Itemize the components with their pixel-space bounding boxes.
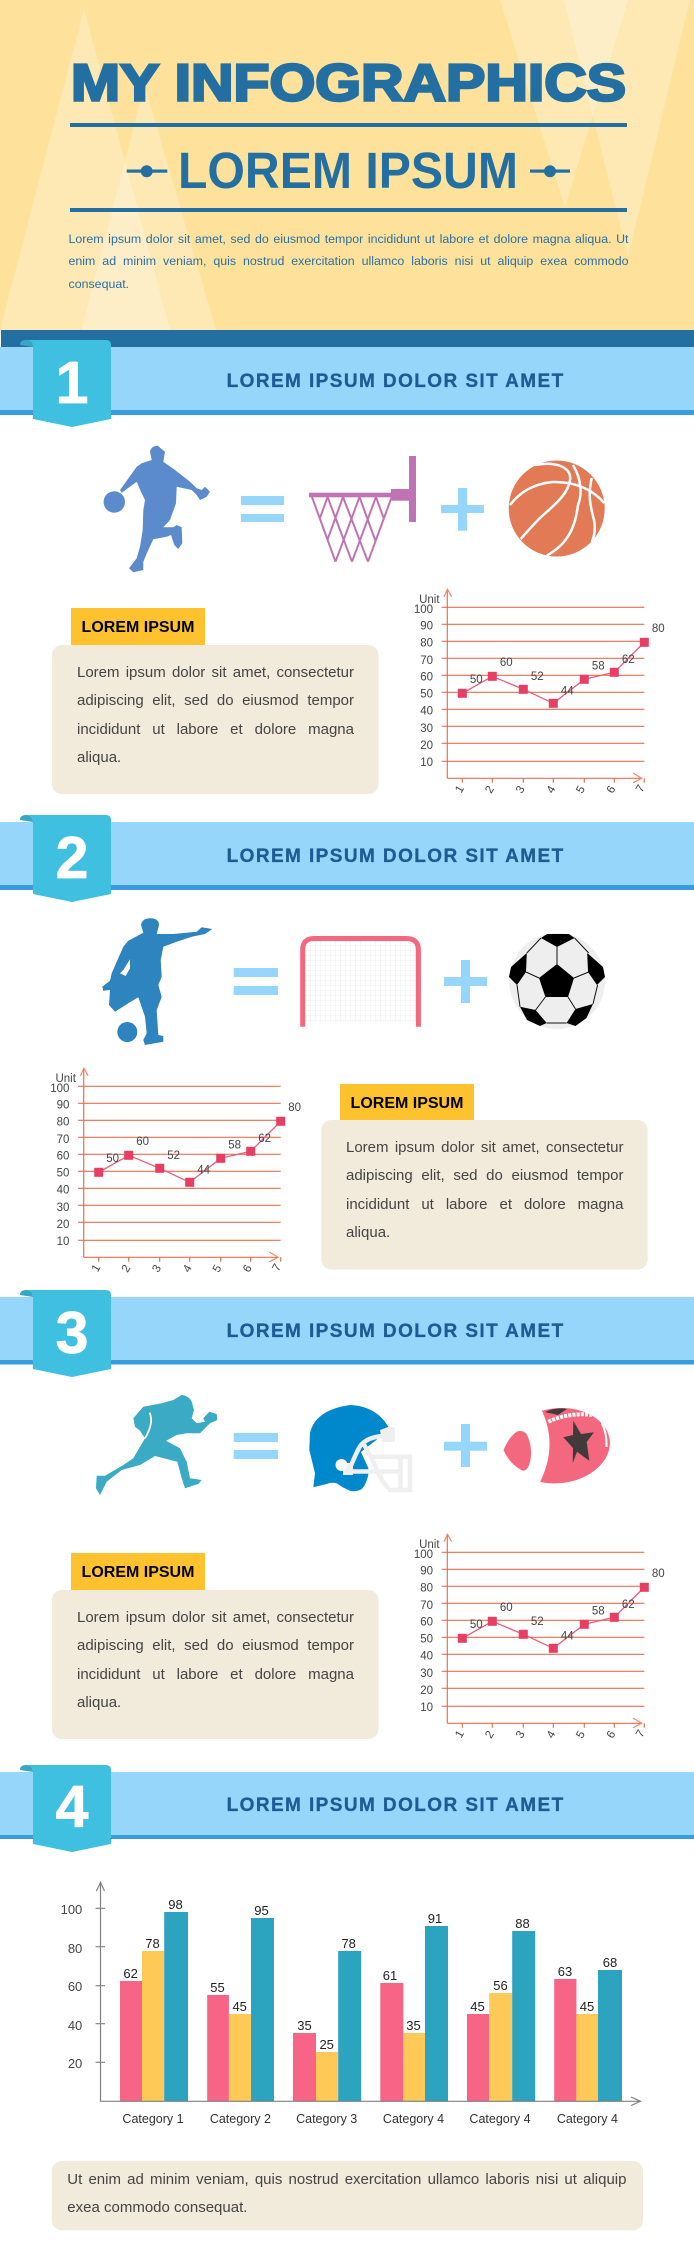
tag (71, 608, 205, 645)
icon: plus sign (444, 1424, 487, 1467)
section 1 line chart (414, 589, 665, 796)
section 1 line chart: 44 (561, 685, 574, 697)
value labels: 62 (123, 1966, 138, 1981)
tag: LOREM IPSUM (82, 619, 194, 636)
yellow series (142, 1951, 598, 2101)
y axis labels (61, 1902, 82, 2071)
section 4 (0, 1765, 694, 2230)
value labels: 35 (406, 2018, 421, 2033)
category labels: Category 1 (122, 2112, 184, 2126)
section 2 line chart: 10 (57, 1236, 69, 1248)
value labels: 45 (232, 1999, 247, 2014)
section 2 line chart: 100 (50, 1083, 69, 1095)
y axis labels: 100 (61, 1902, 82, 1917)
tag: LOREM IPSUM (82, 1564, 194, 1581)
section 1 line chart: 90 (420, 621, 433, 633)
section 2 line chart: 5 (211, 1263, 224, 1275)
section 1 line chart: 7 (634, 783, 648, 795)
icon: plus sign (444, 960, 487, 1003)
section 3 line chart: 44 (561, 1630, 574, 1642)
icon: equals sign (234, 1433, 278, 1459)
section 2 line chart: 1 (90, 1263, 103, 1274)
section 3 line chart: 20 (420, 1685, 433, 1697)
value labels: 45 (580, 1999, 594, 2014)
section 2 line chart: 58 (228, 1140, 241, 1152)
pink series (120, 1979, 576, 2101)
value labels: 98 (168, 1897, 183, 1912)
section 1 line chart: 80 (420, 638, 433, 650)
section 1 line chart: 3 (514, 784, 528, 796)
value labels: 88 (515, 1916, 530, 1931)
icon: basketball hoop (309, 456, 416, 562)
section 1 line chart: 2 (483, 784, 497, 796)
section 2 number ribbon (20, 815, 111, 902)
icon: soccer ball (509, 933, 605, 1029)
section 1 banner (0, 347, 694, 415)
section 2 line chart: 20 (57, 1219, 69, 1231)
section 4 banner (0, 1772, 694, 1839)
section 2 (0, 815, 694, 1275)
section 4 number ribbon: 4 (56, 1774, 89, 1840)
icon: soccer player (102, 918, 212, 1045)
body text: Lorem ipsum dolor sit amet, consectetur adipiscing elit, sed do eiusmod tempor incididunt ut labore et dolore magna aliqua. (346, 1139, 624, 1241)
title: MY INFOGRAPHICS (71, 54, 626, 112)
section 1 line chart: 60 (420, 672, 433, 684)
category labels: Category 4 (469, 2112, 531, 2126)
icon: american football (495, 1403, 614, 1488)
section 2 text panel (321, 1084, 648, 1270)
section 1 line chart: 80 (652, 623, 665, 635)
y axis labels: 20 (68, 2056, 82, 2071)
section 3 line chart: 7 (634, 1728, 648, 1740)
intro paragraph: enim ad minim veniam, quis nostrud exercitation ullamco laboris nisi ut aliquip exea commodo (68, 254, 628, 268)
body text: Lorem ipsum dolor sit amet, consectetur adipiscing elit, sed do eiusmod tempor incididunt ut labore et dolore magna aliqua. (77, 664, 354, 766)
value labels: 95 (254, 1903, 269, 1918)
y axis labels: 40 (68, 2018, 82, 2033)
icon: left ornament (127, 165, 167, 177)
section 3 line chart: 1 (453, 1729, 467, 1740)
section 4 heading: LOREM IPSUM DOLOR SIT AMET (227, 1795, 565, 1816)
section 1 heading: LOREM IPSUM DOLOR SIT AMET (227, 371, 565, 392)
section 3 line chart: 50 (470, 1619, 483, 1631)
value labels: 55 (210, 1980, 225, 1995)
section 3 line chart: 30 (420, 1668, 433, 1680)
section 1 line chart: 40 (420, 706, 433, 718)
section 2 line chart: 70 (57, 1134, 69, 1146)
teal series (164, 1912, 622, 2101)
y axis labels: 60 (68, 1979, 82, 1994)
section 2 line chart: 2 (120, 1263, 133, 1275)
section 3 line chart: 80 (420, 1583, 433, 1595)
section 3 line chart: 90 (420, 1566, 433, 1578)
section 1 line chart: 10 (420, 757, 433, 769)
section 3 text panel (52, 1553, 378, 1739)
section 1 line chart: 52 (531, 671, 544, 683)
section 3 (0, 1290, 694, 1741)
section 3 line chart: Unit (419, 1539, 440, 1551)
section 3 line chart: 6 (605, 1729, 618, 1741)
subtitle: LOREM IPSUM (178, 142, 518, 199)
value labels: 35 (297, 2018, 312, 2033)
section 2 banner (0, 822, 694, 890)
section 3 line chart: 58 (592, 1606, 605, 1618)
section 3 line chart: 52 (531, 1616, 544, 1628)
section 1 line chart: 50 (470, 674, 483, 686)
title rule (70, 123, 627, 127)
section 1 line chart: 50 (420, 688, 433, 700)
category labels: Category 4 (557, 2112, 618, 2126)
footer text panel (52, 2161, 643, 2230)
section 2 line chart: 80 (57, 1117, 69, 1129)
section 1 line chart: 58 (592, 661, 605, 673)
section 3 line chart: 80 (652, 1568, 665, 1580)
value labels: 45 (470, 1999, 485, 2014)
intro paragraph (68, 228, 628, 298)
section 3 line chart: 70 (420, 1600, 433, 1612)
section 1 line chart: 20 (420, 740, 433, 752)
value labels (123, 1897, 617, 2052)
section 1 line chart: 70 (420, 655, 433, 667)
section 1 line chart: 62 (622, 654, 635, 666)
section 2 line chart: 44 (197, 1164, 211, 1176)
section 2 line chart: 3 (150, 1263, 164, 1275)
bar chart (61, 1882, 641, 2126)
axes (96, 1882, 641, 2106)
category labels (122, 2112, 618, 2126)
value labels: 61 (383, 1968, 397, 1983)
section 1 line chart: 5 (574, 784, 588, 796)
section 2 line chart: 52 (167, 1150, 180, 1162)
section 3 line chart: 2 (483, 1729, 497, 1741)
value labels: 63 (558, 1964, 572, 1979)
section 2 line chart: 60 (57, 1151, 69, 1163)
section 2 line chart: 4 (181, 1263, 195, 1275)
icon: plus sign (441, 488, 484, 531)
section 2 line chart: 62 (258, 1133, 271, 1145)
section 1 number ribbon: 1 (56, 350, 88, 416)
value labels: 78 (341, 1936, 356, 1951)
icon: basketball player (104, 446, 210, 572)
section 3 line chart: 5 (574, 1729, 588, 1741)
intro paragraph: consequat. (68, 277, 129, 291)
section 2 line chart: 40 (57, 1185, 69, 1197)
icon: right ornament (530, 165, 570, 177)
category labels: Category 3 (296, 2112, 357, 2126)
section 2 line chart: 50 (106, 1153, 119, 1165)
section 1 line chart: 1 (453, 784, 467, 795)
section 3 line chart: 4 (545, 1729, 559, 1741)
section 3 line chart: 60 (500, 1602, 513, 1614)
section 1 line chart: 6 (605, 784, 618, 796)
section 2 line chart: 50 (57, 1167, 69, 1179)
section 1 line chart: 100 (414, 604, 433, 616)
header dark band (1, 330, 694, 347)
section 3 number ribbon: 3 (56, 1300, 88, 1366)
section 2 line chart: Unit (55, 1073, 77, 1085)
icon: football runner (96, 1395, 217, 1495)
intro paragraph: Lorem ipsum dolor sit amet, sed do eiusmod tempor incididunt ut labore et dolore magna aliqua. Ut (68, 232, 628, 246)
section 2 number ribbon: 2 (56, 825, 88, 891)
icon: soccer goal (303, 938, 418, 1027)
footer text: Ut enim ad minim veniam, quis nostrud exercitation ullamco laboris nisi ut aliquip exea commodo consequat. (67, 2171, 626, 2216)
section 2 line chart: 90 (57, 1100, 69, 1112)
section 1 number ribbon (20, 340, 111, 427)
section 1 line chart: 4 (545, 784, 559, 796)
section 3 line chart: 10 (420, 1702, 433, 1714)
icon: equals sign (241, 496, 284, 522)
tag (340, 1084, 474, 1121)
category labels: Category 2 (210, 2112, 271, 2126)
icon: basketball (509, 460, 605, 556)
tag: LOREM IPSUM (351, 1095, 463, 1112)
value labels: 68 (603, 1955, 617, 1970)
section 2 line chart (50, 1068, 301, 1275)
section 1 line chart: 60 (500, 657, 513, 669)
section 3 line chart: 3 (514, 1729, 528, 1741)
value labels: 91 (428, 1911, 442, 1926)
section 3 banner (0, 1297, 694, 1364)
subtitle rule (70, 208, 627, 212)
icon: equals sign (234, 968, 278, 995)
section 1 (0, 340, 694, 796)
header background (0, 0, 694, 330)
section 2 line chart: 60 (136, 1136, 149, 1148)
section 3 line chart: 50 (420, 1633, 433, 1645)
value labels: 56 (493, 1978, 508, 1993)
section 2 line chart: 30 (57, 1202, 69, 1214)
category labels: Category 4 (383, 2112, 444, 2126)
section 4 number ribbon (20, 1765, 111, 1852)
section 3 line chart: 62 (622, 1599, 635, 1611)
section 1 line chart: 30 (420, 723, 433, 735)
section 3 heading: LOREM IPSUM DOLOR SIT AMET (227, 1321, 565, 1342)
value labels: 78 (145, 1936, 160, 1951)
section 3 line chart: 100 (414, 1549, 433, 1561)
section 1 line chart: Unit (419, 594, 440, 606)
section 2 line chart: 80 (288, 1102, 301, 1114)
tag (71, 1553, 205, 1590)
section 3 line chart: 40 (420, 1651, 433, 1663)
section 3 line chart: 60 (420, 1617, 433, 1629)
section 3 number ribbon (20, 1290, 111, 1377)
section 2 line chart: 7 (270, 1262, 284, 1274)
header panel (0, 0, 694, 330)
section 3 line chart (414, 1534, 665, 1741)
icon: football helmet (309, 1405, 410, 1491)
section 1 text panel (52, 608, 378, 794)
section 2 line chart: 6 (241, 1263, 255, 1275)
value labels: 25 (319, 2037, 334, 2052)
y axis labels: 80 (68, 1941, 82, 1956)
section 2 heading: LOREM IPSUM DOLOR SIT AMET (227, 846, 565, 867)
body text: Lorem ipsum dolor sit amet, consectetur adipiscing elit, sed do eiusmod tempor incididunt ut labore et dolore magna aliqua. (77, 1609, 354, 1711)
